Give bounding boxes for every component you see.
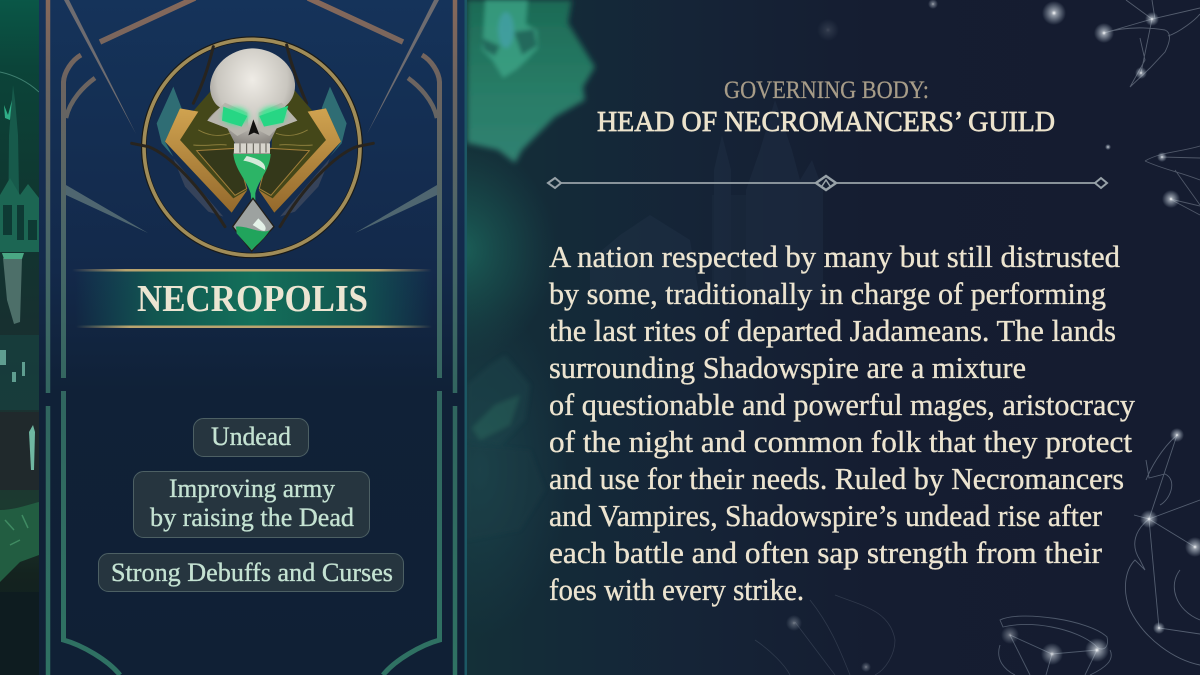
background castle silhouette: [590, 100, 823, 300]
body paragraph: A nation respected by many but still distrusted: [549, 239, 1120, 274]
trait pill: Improving army: [134, 472, 370, 538]
body paragraph: [549, 239, 1135, 607]
heading: governing body: GOVERNING BODY:: [724, 77, 929, 104]
emblem skull: [207, 48, 297, 154]
background town and tents: [472, 360, 528, 440]
ornamental divider: [548, 176, 1107, 190]
body paragraph: surrounding Shadowspire are a mixture: [549, 350, 1026, 385]
panel frame lines: [48, 0, 455, 675]
heading: governing body: HEAD OF NECROMANCERS’ GUILD: [597, 106, 1055, 138]
left background city strip: [0, 0, 39, 675]
emblem ring: [142, 37, 362, 258]
emblem hourglass: [233, 154, 274, 251]
constellation: right side creature: [1145, 146, 1200, 215]
constellation: top right dragon: [1104, 0, 1200, 87]
constellation: bottom centre feather: [755, 595, 895, 675]
right background with nebula: [467, 0, 1200, 675]
trait pill: Improving army: by raising the Dead: [150, 503, 354, 532]
body paragraph: of the night and common folk that they protect: [549, 424, 1132, 459]
trait pill: Undead: [194, 418, 308, 456]
trait pill: Strong Debuffs and Curses: Strong Debuffs and Curses: [111, 558, 393, 587]
panel frame tapered diagonals: [64, 0, 439, 233]
emblem right wing: [259, 90, 341, 213]
emblem left wing: [165, 90, 247, 213]
emblem: skull and hourglass: [132, 37, 373, 258]
trait pill: Undead: Undead: [211, 422, 291, 451]
trait pill: Improving army: Improving army: [169, 474, 335, 503]
body paragraph: foes with every strike.: [549, 572, 804, 607]
icon: spectral skull in nebula: [482, 0, 538, 78]
constellation: bottom cauldron: [999, 616, 1111, 675]
emblem dark branches: [132, 45, 373, 227]
body paragraph: by some, traditionally in charge of performing: [549, 276, 1106, 311]
body paragraph: of questionable and powerful mages, aristocracy: [549, 387, 1135, 422]
body paragraph: the last rites of departed Jadameans. The lands: [549, 313, 1116, 348]
body paragraph: each battle and often sap strength from their: [549, 535, 1103, 570]
body paragraph: and use for their needs. Ruled by Necromancers: [549, 461, 1124, 496]
title banner: NECROPOLIS: [72, 269, 433, 328]
heading: governing body: [597, 77, 1055, 138]
title banner: NECROPOLIS: NECROPOLIS: [137, 278, 368, 320]
constellation: lower right skull creature: [1125, 435, 1200, 665]
emblem blue drapes: [157, 87, 347, 217]
body paragraph: and Vampires, Shadowspire’s undead rise after: [549, 498, 1103, 533]
left panel: [39, 0, 467, 675]
stars: [786, 0, 1200, 672]
